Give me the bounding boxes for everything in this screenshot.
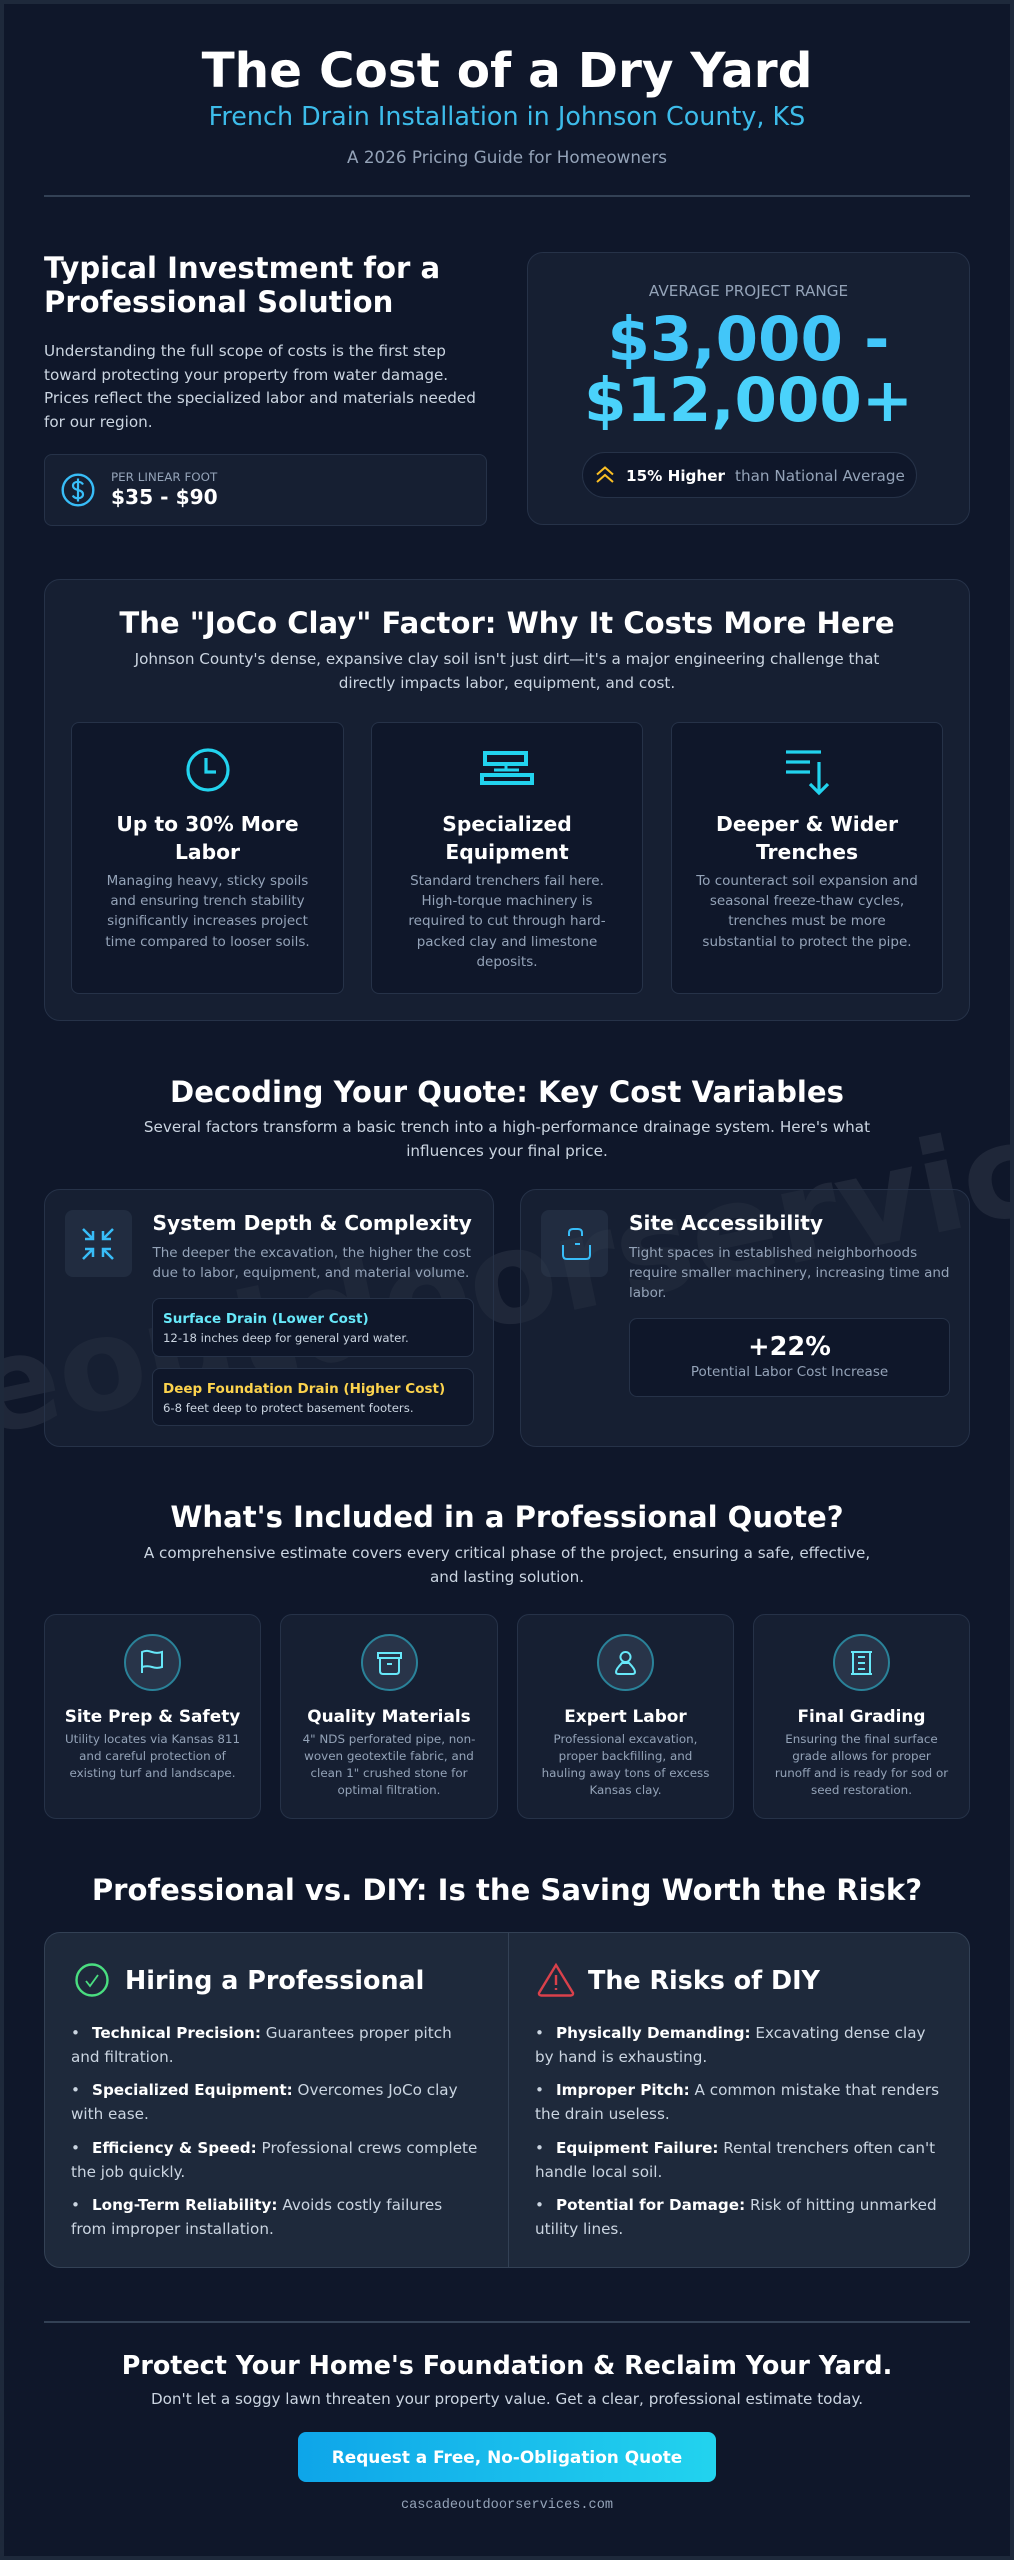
list: DIY: • bbox=[535, 2139, 544, 2157]
text: significantly increases project bbox=[107, 913, 308, 929]
CTA button: Request a Free, No-Obligation Quote bbox=[332, 2447, 682, 2467]
label: PER LINEAR FOOT bbox=[111, 470, 217, 484]
card: site prep bbox=[44, 1614, 261, 1819]
intro paragraph: toward protecting your property from water damage. bbox=[44, 366, 448, 384]
title: Up to 30% More bbox=[116, 812, 299, 836]
text: High-torque machinery is bbox=[421, 893, 593, 909]
icon: bag bbox=[541, 1210, 608, 1277]
list: DIY bbox=[535, 2024, 939, 2238]
header bbox=[44, 43, 970, 197]
title: System Depth & Complexity bbox=[152, 1211, 472, 1235]
price range: $3,000 - bbox=[608, 304, 889, 375]
text bbox=[542, 1732, 709, 1797]
list: DIY: the drain useless. Equipment Failure: Rental trenchers often can't bbox=[535, 2105, 935, 2157]
section heading: decoding your quote: Decoding Your Quote: Key Cost Variables bbox=[170, 1074, 844, 1108]
text: substantial to protect the pipe. bbox=[702, 934, 912, 950]
panel: site accessibility bbox=[520, 1189, 970, 1447]
text: Tight spaces in established neighborhoods bbox=[629, 1245, 917, 1261]
title: Trenches bbox=[756, 840, 858, 864]
section description bbox=[144, 1118, 870, 1160]
section heading: typical investment: Professional Solution bbox=[44, 284, 393, 318]
text bbox=[775, 1732, 948, 1797]
list: DIY: • bbox=[535, 2196, 544, 2214]
list: professional: the job quickly. Long-Term Reliability: Avoids costly failures bbox=[71, 2163, 442, 2214]
list: DIY: utility lines. bbox=[535, 2220, 623, 2238]
description bbox=[134, 650, 879, 692]
average project range card bbox=[527, 252, 970, 525]
card: trenches bbox=[671, 722, 943, 994]
text: required to cut through hard- bbox=[408, 913, 606, 929]
card: materials bbox=[280, 1614, 498, 1819]
text bbox=[628, 1245, 949, 1301]
section description bbox=[144, 1544, 870, 1586]
description: directly impacts labor, equipment, and cost. bbox=[339, 674, 675, 692]
icon: document bbox=[833, 1634, 890, 1691]
title: Site Prep & Safety bbox=[65, 1706, 240, 1726]
list: DIY: • bbox=[535, 2081, 544, 2099]
heading: hiring a professional: Hiring a Professional bbox=[125, 1965, 424, 1995]
price range bbox=[584, 304, 913, 436]
text: To counteract soil expansion and bbox=[696, 873, 918, 889]
section description: Several factors transform a basic trench into a high-performance drainage system. Here's what bbox=[144, 1118, 870, 1136]
text bbox=[696, 873, 918, 950]
icon: clock bbox=[186, 748, 230, 792]
title: Specialized bbox=[442, 812, 572, 836]
panel: comparison bbox=[44, 1932, 970, 2268]
text: Managing heavy, sticky spoils bbox=[107, 873, 308, 889]
tagline: A 2026 Pricing Guide for Homeowners bbox=[347, 147, 667, 167]
text: Ensuring the final surface bbox=[785, 1732, 938, 1746]
text: clean 1" crushed stone for bbox=[310, 1766, 468, 1780]
section heading: typical investment: Typical Investment for a bbox=[44, 251, 440, 285]
text: packed clay and limestone bbox=[417, 934, 597, 950]
list: professional bbox=[71, 2024, 477, 2238]
intro paragraph: for our region. bbox=[44, 413, 153, 431]
list: professional: • bbox=[71, 2024, 80, 2042]
title: Equipment bbox=[445, 840, 569, 864]
section description: A comprehensive estimate covers every critical phase of the project, ensuring a safe, effective, bbox=[144, 1544, 870, 1562]
title: The Cost of a Dry Yard bbox=[202, 43, 812, 99]
comparison pill bbox=[582, 452, 917, 498]
intro paragraph: Prices reflect the specialized labor and materials needed bbox=[44, 389, 476, 407]
list: professional: • bbox=[71, 2196, 80, 2214]
text: Kansas clay. bbox=[589, 1783, 662, 1797]
section description: and lasting solution. bbox=[430, 1568, 584, 1586]
text: and ensuring trench stability bbox=[110, 893, 305, 909]
title: Expert Labor bbox=[564, 1706, 687, 1726]
CTA button bbox=[298, 2432, 716, 2482]
subtitle: French Drain Installation in Johnson County, KS bbox=[209, 101, 805, 131]
text bbox=[65, 1732, 240, 1780]
text: grade allows for proper bbox=[792, 1749, 931, 1763]
text: due to labor, equipment, and material volume. bbox=[152, 1265, 469, 1281]
text bbox=[408, 873, 606, 970]
text: existing turf and landscape. bbox=[69, 1766, 236, 1780]
panel: system depth bbox=[44, 1189, 494, 1447]
text: woven geotextile fabric, and bbox=[304, 1749, 474, 1763]
CTA text: Don't let a soggy lawn threaten your property value. Get a clear, professional estimate today. bbox=[151, 2390, 863, 2408]
price range: $12,000+ bbox=[584, 364, 913, 436]
text: 4" NDS perforated pipe, non- bbox=[303, 1732, 475, 1746]
tier: deep drain bbox=[152, 1368, 474, 1426]
label: AVERAGE PROJECT RANGE bbox=[649, 282, 848, 300]
card: equipment bbox=[371, 722, 643, 994]
tier: surface drain bbox=[152, 1298, 474, 1357]
list: DIY: by hand is exhausting. Improper Pitch: A common mistake that renders bbox=[535, 2048, 939, 2099]
list: DIY: handle local soil. Potential for Damage: Risk of hitting unmarked bbox=[535, 2163, 937, 2214]
footer rule and call to action bbox=[44, 2321, 970, 2513]
icon: person bbox=[597, 1634, 654, 1691]
list: DIY: Physically Demanding: Excavating dense clay bbox=[556, 2024, 926, 2042]
value: +22% bbox=[748, 1332, 831, 1362]
text: Utility locates via Kansas 811 bbox=[65, 1732, 240, 1746]
icon: chevrons up bbox=[596, 466, 614, 483]
heading: risks of DIY: The Risks of DIY bbox=[588, 1965, 820, 1995]
text: 6-8 feet deep to protect basement footers. bbox=[163, 1400, 414, 1414]
icon: sort descending bbox=[786, 750, 830, 796]
title: Quality Materials bbox=[307, 1706, 471, 1726]
icon: cup bbox=[361, 1634, 418, 1691]
label: Surface Drain (Lower Cost) bbox=[163, 1311, 369, 1327]
section description: influences your final price. bbox=[406, 1142, 608, 1160]
intro paragraph bbox=[44, 342, 476, 431]
description: Johnson County's dense, expansive clay soil isn't just dirt—it's a major engineering challenge that bbox=[135, 650, 879, 668]
list: professional: Technical Precision: Guarantees proper pitch bbox=[92, 2024, 452, 2042]
text: Standard trenchers fail here. bbox=[410, 873, 604, 889]
intro paragraph: Understanding the full scope of costs is the first step bbox=[44, 342, 446, 360]
text: and careful protection of bbox=[79, 1749, 226, 1763]
icon: check circle bbox=[75, 1963, 109, 1997]
title: Labor bbox=[175, 840, 240, 864]
text: optimal filtration. bbox=[338, 1783, 440, 1797]
icon: equipment bbox=[480, 751, 534, 785]
list: professional: and filtration. Specialized Equipment: Overcomes JoCo clay bbox=[71, 2048, 458, 2099]
text: seasonal freeze-thaw cycles, bbox=[710, 893, 904, 909]
text: seed restoration. bbox=[811, 1783, 912, 1797]
title bbox=[442, 812, 572, 864]
comparison text: 15% Higher than National Average bbox=[626, 467, 905, 485]
text bbox=[152, 1245, 471, 1281]
text bbox=[105, 873, 310, 950]
section heading: professional vs DIY: Professional vs. DIY: Is the Saving Worth the Risk? bbox=[92, 1872, 922, 1906]
label: Deep Foundation Drain (Higher Cost) bbox=[163, 1381, 445, 1397]
list: professional: • bbox=[71, 2081, 80, 2099]
text: trenches must be more bbox=[728, 913, 886, 929]
text: deposits. bbox=[476, 954, 538, 970]
text: Professional excavation, bbox=[554, 1732, 697, 1746]
text: hauling away tons of excess bbox=[542, 1766, 709, 1780]
icon: flag bbox=[124, 1634, 181, 1691]
list: DIY: • bbox=[535, 2024, 544, 2042]
title: Final Grading bbox=[797, 1706, 926, 1726]
heading: The "JoCo Clay" Factor: Why It Costs More Here bbox=[119, 606, 895, 640]
card: labor bbox=[517, 1614, 734, 1819]
icon: dollar bbox=[62, 474, 94, 506]
section heading: typical investment bbox=[44, 251, 440, 318]
text bbox=[303, 1732, 475, 1797]
title bbox=[116, 812, 299, 864]
title bbox=[716, 812, 898, 864]
text: labor. bbox=[629, 1285, 666, 1301]
card: grading bbox=[753, 1614, 970, 1819]
section heading: what's included: What's Included in a Professional Quote? bbox=[170, 1500, 844, 1534]
icon: warning triangle bbox=[538, 1962, 574, 1997]
card: labor bbox=[71, 722, 344, 994]
stat: labor cost bbox=[629, 1318, 950, 1397]
list: professional: from improper installation. bbox=[71, 2220, 274, 2238]
text: 12-18 inches deep for general yard water. bbox=[163, 1331, 409, 1345]
text: runoff and is ready for sod or bbox=[775, 1766, 948, 1780]
panel: JoCo clay factor bbox=[44, 579, 970, 1021]
list: professional: with ease. Efficiency & Speed: Professional crews complete bbox=[71, 2105, 477, 2157]
per linear foot card bbox=[44, 454, 487, 526]
value: $35 - $90 bbox=[111, 485, 218, 509]
list: professional: • bbox=[71, 2139, 80, 2157]
label: Potential Labor Cost Increase bbox=[691, 1364, 888, 1380]
icon: arrows in bbox=[65, 1210, 132, 1277]
text: The deeper the excavation, the higher the cost bbox=[152, 1245, 471, 1261]
text: require smaller machinery, increasing time and bbox=[629, 1265, 949, 1281]
title: Site Accessibility bbox=[629, 1211, 823, 1235]
CTA heading: Protect Your Home's Foundation & Reclaim Your Yard. bbox=[122, 2350, 892, 2380]
text: proper backfilling, and bbox=[559, 1749, 692, 1763]
website: cascadeoutdoorservices.com bbox=[401, 2498, 613, 2513]
text: time compared to looser soils. bbox=[105, 934, 310, 950]
title: Deeper & Wider bbox=[716, 812, 898, 836]
